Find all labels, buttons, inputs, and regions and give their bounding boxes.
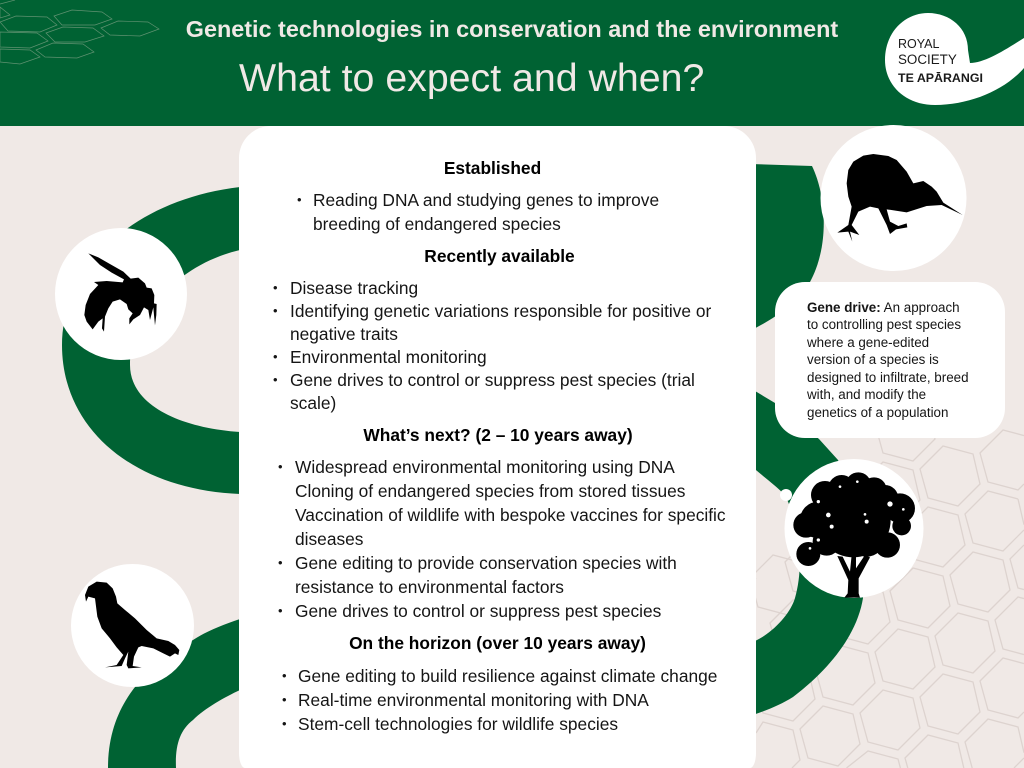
section: established: breeding of endangered species [313, 214, 561, 234]
section: recently available: Environmental monitoring [290, 347, 487, 367]
panel: gene drive definition: designed to infiltrate, breed [807, 370, 969, 385]
section: what's next: Vaccination of wildlife with bespoke vaccines for specific [295, 505, 726, 525]
section: what's next: • [278, 459, 283, 474]
green ribbon: right upper [750, 164, 824, 331]
section: on the horizon: Gene editing to build resilience against climate change [298, 666, 717, 686]
heading: established: Established [444, 158, 541, 178]
section: what's next [278, 425, 726, 621]
section: on the horizon: Real-time environmental monitoring with DNA [298, 690, 649, 710]
panel: gene drive definition: with, and modify the [807, 387, 926, 402]
section: established: Reading DNA and studying genes to improve [313, 190, 659, 210]
section: recently available: • [273, 280, 278, 295]
heading: recently available: Recently available [424, 246, 575, 266]
section: recently available: scale) [290, 393, 336, 413]
section: recently available: negative traits [290, 324, 398, 344]
logo: SOCIETY [898, 52, 957, 67]
section: on the horizon [282, 633, 717, 734]
logo: TE APĀRANGI [898, 71, 983, 85]
icon: parrot [71, 564, 194, 687]
section: established: • [297, 192, 302, 207]
section: recently available: • [273, 303, 278, 318]
section: what's next: resistance to environmental factors [295, 577, 564, 597]
section: what's next: Cloning of endangered species from stored tissues [295, 481, 685, 501]
subtitle: What to expect and when? [239, 56, 704, 100]
panel: gene drive definition [775, 282, 1005, 438]
icon: kiwi [820, 125, 966, 271]
section: recently available: • [273, 349, 278, 364]
header band [0, 0, 1024, 126]
section: on the horizon: • [282, 668, 287, 683]
panel: gene drive definition: version of a species is [807, 352, 939, 367]
header hexagon outlines [0, 0, 160, 64]
section: on the horizon: • [282, 692, 287, 707]
heading: what's next: What’s next? (2 – 10 years away) [363, 425, 633, 445]
icon: tree [784, 459, 924, 598]
panel: gene drive definition: to controlling pest species [807, 317, 961, 332]
section: what's next: Widespread environmental monitoring using DNA [295, 457, 675, 477]
section: recently available: Disease tracking [290, 278, 418, 298]
section: recently available: Identifying genetic variations responsible for positive or [290, 301, 711, 321]
section: what's next: • [278, 603, 283, 618]
section: what's next: • [278, 555, 283, 570]
section: what's next: diseases [295, 529, 363, 549]
section: what's next: Gene editing to provide conservation species with [295, 553, 677, 573]
section: recently available: • [273, 372, 278, 387]
icon: small dot [780, 489, 792, 501]
section: on the horizon: • [282, 716, 287, 731]
hexagon pattern [732, 401, 1024, 768]
green ribbon: bottom left [108, 619, 240, 768]
logo: ROYAL [898, 37, 939, 51]
icon: wasp [55, 228, 187, 360]
heading: on the horizon: On the horizon (over 10 years away) [349, 633, 646, 653]
panel: gene drive definition: genetics of a population [807, 405, 948, 420]
title: Genetic technologies in conservation and the environment [186, 16, 838, 42]
section: recently available: Gene drives to control or suppress pest species (trial [290, 370, 695, 390]
section: established [297, 158, 659, 234]
logo [885, 13, 1024, 105]
section: what's next: Gene drives to control or suppress pest species [295, 601, 661, 621]
panel: gene drive definition: where a gene-edited [807, 335, 929, 350]
panel: timeline card [239, 126, 756, 768]
panel: gene drive definition: Gene drive: An approach [807, 300, 960, 315]
green ribbon: left loop [62, 187, 240, 494]
green ribbon: right lower [750, 388, 863, 716]
section: recently available [273, 246, 711, 413]
section: on the horizon: Stem-cell technologies for wildlife species [298, 714, 618, 734]
